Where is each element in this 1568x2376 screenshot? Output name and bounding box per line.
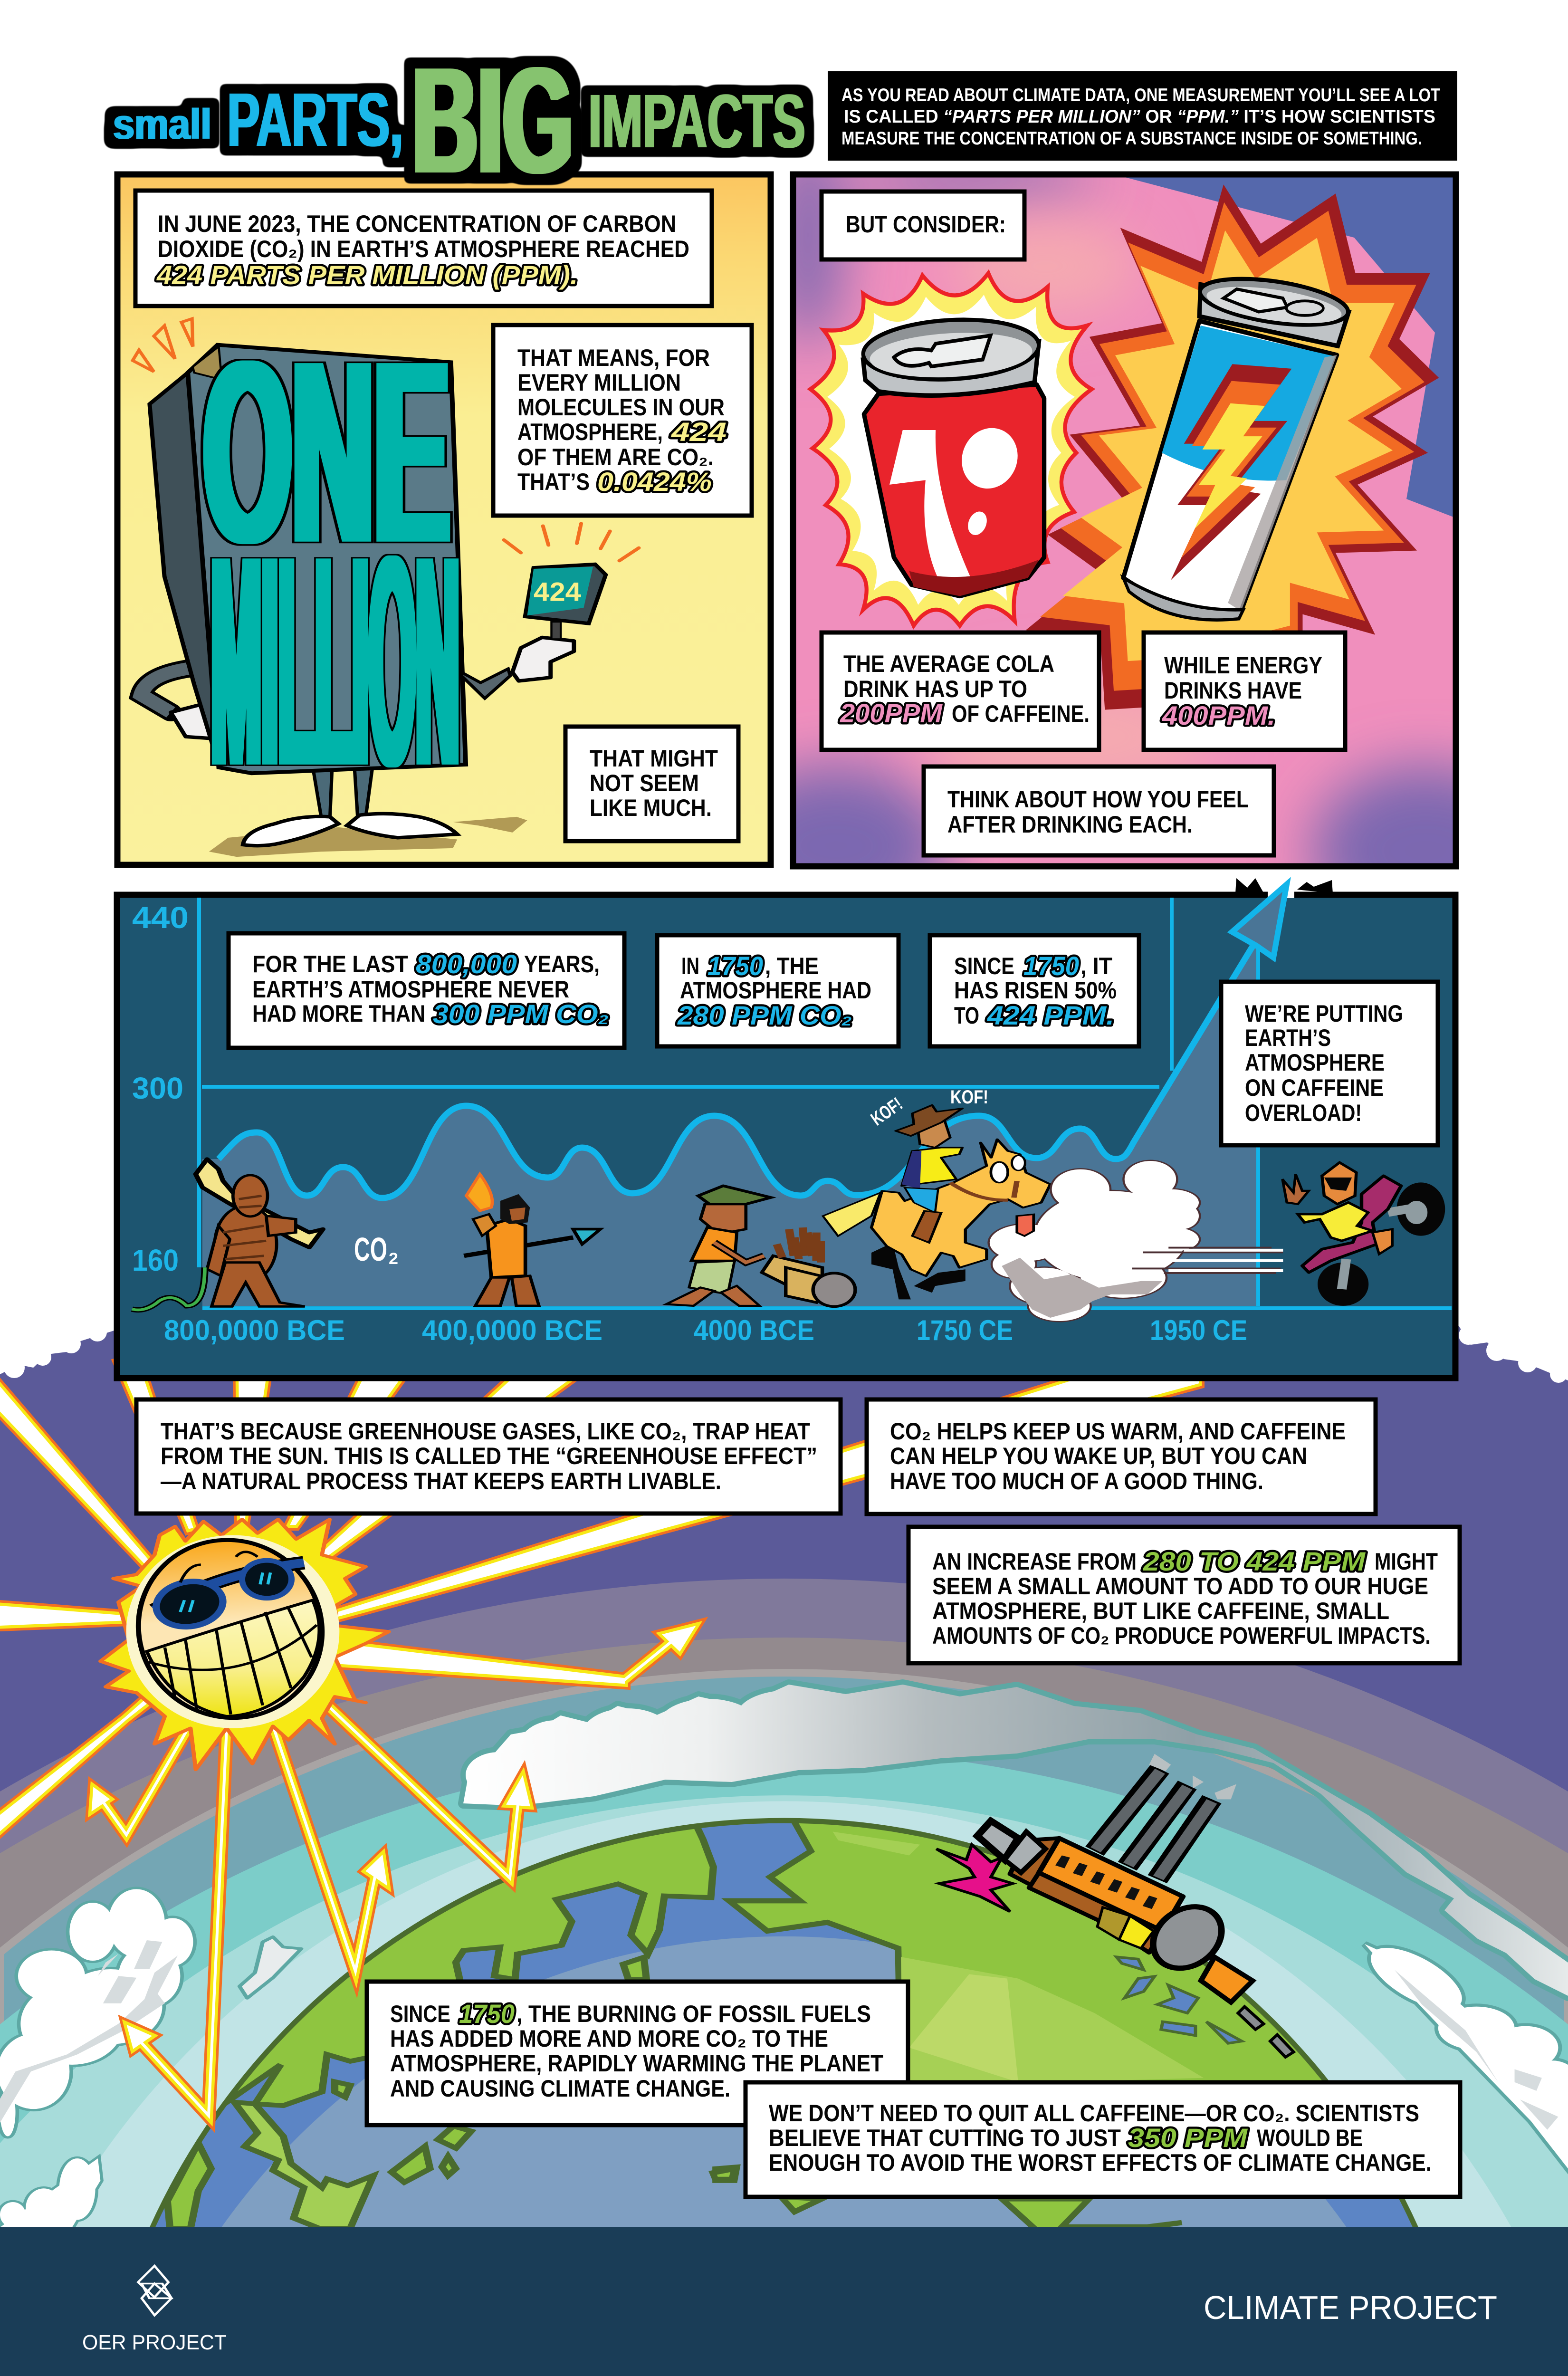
horse back legs	[871, 1243, 966, 1299]
footer project name: CLIMATE PROJECT	[1204, 2289, 1497, 2326]
text box: in 1750: , THE	[765, 953, 819, 979]
icon: smiling sun with sunglasses	[100, 1519, 389, 1770]
y axis labels: 300	[132, 1071, 183, 1105]
text box: that means: 424	[671, 417, 727, 447]
text box: energy drinks	[1144, 632, 1345, 750]
text box: june 2023: 424 PARTS PER MILLION (PPM).	[156, 260, 578, 290]
text box: greenhouse gases: FROM THE SUN. THIS IS CALLED THE “GREENHOUSE EFFECT”	[161, 1443, 817, 1469]
text box: since 1750	[930, 935, 1139, 1046]
sun glow	[126, 1535, 339, 1728]
text box: that means: ATMOSPHERE,	[517, 419, 663, 445]
text box: since 1750: 424 PPM.	[987, 1000, 1114, 1030]
text box: june 2023: DIOXIDE (CO₂) IN EARTH’S ATMOSPHERE REACHED	[158, 236, 689, 262]
y axis labels	[132, 901, 189, 1277]
text box: 350 ppm: 350 PPM	[1128, 2123, 1248, 2153]
text box: that means: OF THEM ARE CO₂.	[517, 444, 714, 470]
cola burst	[811, 273, 1092, 626]
text box: but consider	[822, 192, 1024, 259]
text box: 280 to 424 ppm: SEEM A SMALL AMOUNT TO ADD TO OUR HUGE	[932, 1573, 1428, 1600]
cloud: right side	[1358, 1936, 1568, 2169]
text box: last 800,000 years: YEARS,	[524, 951, 600, 977]
title word: small: small	[113, 101, 211, 148]
text box: caffeine overload: OVERLOAD!	[1245, 1100, 1362, 1126]
motorbike frame	[1302, 1176, 1401, 1273]
alert marks	[133, 319, 193, 372]
intro text block: AS YOU READ ABOUT CLIMATE DATA, ONE MEASUREMENT YOU’LL SEE A LOT	[841, 85, 1440, 105]
speed lines	[1132, 1248, 1283, 1273]
continent: right landmass	[713, 1754, 1422, 2233]
text box: last 800,000 years	[229, 933, 624, 1048]
cola can body	[864, 384, 1044, 596]
text box: in 1750: 280 PPM CO₂	[677, 1000, 852, 1030]
horse tongue	[1017, 1214, 1033, 1236]
figure: biker on motorcycle	[1282, 1162, 1445, 1306]
cloud: small and bottom left	[0, 1937, 301, 2227]
blue hatch rays	[1114, 174, 1456, 518]
x axis labels: 800,0000 BCE	[164, 1314, 345, 1346]
factory pipes	[977, 1821, 1018, 1860]
x axis labels	[164, 1314, 1247, 1346]
panel frame	[793, 174, 1456, 866]
text box: last 800,000 years: 300 PPM CO₂	[433, 999, 609, 1029]
title word: PARTS,: PARTS,	[227, 77, 403, 162]
cowboy hat	[896, 1105, 962, 1136]
sun corona	[100, 1519, 389, 1770]
sign	[525, 564, 606, 623]
text box: energy drinks: WHILE ENERGY	[1164, 652, 1322, 679]
text box: fossil fuels: HAS ADDED MORE AND MORE CO₂ TO THE	[390, 2025, 828, 2052]
biker helmet	[1322, 1162, 1356, 1204]
energy can body	[1123, 321, 1337, 612]
text box: fossil fuels: SINCE	[390, 2001, 450, 2027]
panel blotches and texture	[727, 128, 1539, 936]
text box: caffeine overload: EARTH’S	[1245, 1025, 1331, 1051]
text box: cola: 200PPM	[840, 698, 943, 728]
factory windows	[1055, 1856, 1157, 1909]
factory on earth	[937, 1754, 1294, 2057]
panel: caffeine comparison	[727, 128, 1539, 936]
title word: BIG: BIG	[412, 36, 573, 205]
KOF sound text: KOF!	[867, 1093, 907, 1130]
intro text block	[828, 71, 1457, 161]
footer logo text: OER PROJECT	[82, 2331, 227, 2354]
text box: in 1750	[657, 935, 899, 1046]
icon: OER Project logo	[138, 2266, 172, 2315]
factory end wall	[1010, 1838, 1059, 1887]
cans and bursts	[811, 184, 1439, 710]
lakes near factory	[1117, 1957, 1242, 2043]
cola can swoosh	[889, 430, 971, 578]
text box: caffeine overload	[1221, 982, 1438, 1145]
energy can blue	[1162, 326, 1335, 481]
text box: june 2023	[135, 191, 712, 306]
biker front wheel	[1318, 1263, 1368, 1306]
factory smokestacks	[1095, 1769, 1212, 1879]
text box: too much of a good thing: CAN HELP YOU WAKE UP, BUT YOU CAN	[890, 1443, 1307, 1469]
snake	[132, 1267, 205, 1310]
KOF sound text second: KOF!	[950, 1087, 988, 1108]
footer band	[0, 2227, 1568, 2376]
intro text block: MEASURE THE CONCENTRATION OF A SUBSTANCE INSIDE OF SOMETHING.	[841, 128, 1422, 149]
smoke cloud	[990, 1161, 1199, 1321]
biker leg	[1373, 1229, 1392, 1254]
axis lines	[199, 898, 1452, 1308]
legs	[313, 768, 373, 819]
atmosphere band: violet	[0, 1579, 1568, 2233]
atmosphere band: pale teal	[0, 1795, 1568, 2233]
figure: cowboy on horse with smoke	[823, 1105, 1283, 1321]
text box: greenhouse gases: —A NATURAL PROCESS THAT KEEPS EARTH LIVABLE.	[161, 1468, 721, 1495]
text box: might not seem: NOT SEEM	[590, 770, 699, 796]
text box: that means: EVERY MILLION	[517, 369, 681, 396]
text box: greenhouse gases	[136, 1399, 841, 1514]
text box: in 1750: IN	[681, 953, 699, 979]
y axis labels: 440	[132, 901, 189, 935]
energy can tab	[1224, 289, 1287, 312]
horse body	[871, 1139, 1050, 1276]
horse reins	[950, 1181, 1017, 1200]
text box: in 1750: ATMOSPHERE HAD	[680, 977, 871, 1004]
text box: last 800,000 years: HAD MORE THAN	[252, 1000, 425, 1027]
panel: CO2 timeline chart	[117, 878, 1455, 1378]
text box: 280 to 424 ppm	[908, 1527, 1460, 1663]
x axis labels: 4000 BCE	[694, 1314, 814, 1346]
text box: might not seem: THAT MIGHT	[590, 745, 718, 772]
bone	[196, 1159, 323, 1247]
factory annex	[1201, 1957, 1253, 2002]
small trucks	[1238, 2007, 1294, 2057]
pink spill	[937, 1845, 1013, 1912]
title: small PARTS, BIG IMPACTS	[113, 36, 805, 205]
panel: one million character	[117, 174, 771, 865]
scene: space and atmosphere bands	[0, 1322, 1568, 2233]
character: one million block: ONE	[203, 307, 449, 597]
arrow head on curve	[1232, 884, 1287, 958]
factory upper wall	[1039, 1838, 1183, 1931]
figure: farmer with wheelbarrow	[666, 1186, 822, 1306]
atmosphere ring	[0, 1673, 1568, 2233]
block fold	[193, 346, 222, 380]
text box: 280 to 424 ppm: AN INCREASE FROM	[932, 1548, 1137, 1575]
sign handle	[552, 622, 561, 639]
block front	[188, 345, 466, 773]
text box: since 1750: TO	[954, 1002, 979, 1029]
area under CO2 curve	[202, 943, 1258, 1306]
CO2 label: CO	[354, 1231, 387, 1268]
factory lower wall	[1029, 1873, 1163, 1953]
sun face	[131, 1535, 330, 1723]
text box: but consider: BUT CONSIDER:	[846, 211, 1006, 238]
cola can	[862, 316, 1044, 596]
text box: might not seem: LIKE MUCH.	[590, 795, 712, 821]
cola can bubbles	[951, 417, 1028, 499]
text box: last 800,000 years: EARTH’S ATMOSPHERE NEVER	[252, 976, 569, 1003]
earth outline	[150, 1820, 1418, 2233]
ape fur marks	[223, 1196, 266, 1259]
ground shadow	[209, 817, 527, 857]
earth globe with continents	[103, 1754, 1422, 2233]
figure: early human with torch and spear	[464, 1174, 601, 1306]
factory dome	[1139, 1897, 1235, 1978]
land highlights	[833, 1832, 1204, 2087]
text box: 350 ppm: WE DON’T NEED TO QUIT ALL CAFFEINE—OR CO₂. SCIENTISTS	[769, 2100, 1419, 2127]
text box: greenhouse gases: THAT’S BECAUSE GREENHOUSE GASES, LIKE CO₂, TRAP HEAT	[161, 1418, 810, 1445]
sign sparkle marks	[504, 524, 639, 561]
text box: that means: THAT MEANS, FOR	[517, 345, 710, 371]
CO2 curve line	[219, 943, 1254, 1198]
text box: fossil fuels: 1750	[459, 1999, 515, 2029]
figure: wheelbarrow wheel	[786, 1233, 855, 1306]
x axis labels: 1950 CE	[1150, 1314, 1247, 1346]
right arm and glove	[461, 669, 510, 699]
text box: 350 ppm: BELIEVE THAT CUTTING TO JUST	[769, 2125, 1121, 2151]
sun rays: heat and bouncing arrows	[0, 1342, 1197, 2116]
rays yellow layer	[0, 1342, 1197, 2116]
biker rear wheel	[1397, 1182, 1445, 1236]
earth ocean	[150, 1820, 1418, 2233]
text box: in 1750: 1750	[708, 951, 763, 981]
cowboy boot	[912, 1211, 941, 1243]
chart background	[117, 895, 1455, 1378]
text box: last 800,000 years: 800,000	[416, 949, 517, 979]
rays white core	[0, 1342, 1197, 2116]
character: one million block	[133, 307, 639, 857]
text box: 280 to 424 ppm: MIGHT	[1375, 1548, 1438, 1575]
shoes	[243, 814, 457, 846]
continent: left coast, upper	[103, 1785, 736, 2228]
biker body	[1298, 1202, 1373, 1241]
intro text block: IS CALLED “PARTS PER MILLION” OR “PPM.” IT’S HOW SCIENTISTS	[844, 106, 1435, 127]
text box: too much of a good thing: CO₂ HELPS KEEP US WARM, AND CAFFEINE	[890, 1418, 1346, 1445]
ape body	[207, 1175, 305, 1306]
space background	[0, 1326, 1568, 1792]
border gap	[1268, 889, 1294, 898]
text box: 280 to 424 ppm: 280 TO 424 PPM	[1143, 1546, 1366, 1576]
block side	[150, 373, 220, 768]
energy can lid	[1199, 285, 1349, 346]
cloud: left side large	[0, 1889, 193, 2136]
factory door	[1097, 1907, 1130, 1940]
cowboy trousers	[905, 1188, 938, 1213]
text box: caffeine overload: WE’RE PUTTING	[1245, 1000, 1403, 1027]
text box: fossil fuels: ATMOSPHERE, RAPIDLY WARMING THE PLANET	[390, 2050, 883, 2077]
text box: 350 ppm: WOULD BE	[1257, 2125, 1363, 2151]
text box: since 1750: , IT	[1080, 953, 1112, 979]
text box: 350 ppm	[746, 2082, 1460, 2197]
x axis labels: 1750 CE	[917, 1314, 1013, 1346]
atmosphere band: teal	[0, 1749, 1568, 2233]
title word: IMPACTS: IMPACTS	[588, 78, 805, 163]
cloud: long smog band following the atmosphere	[463, 1685, 1568, 1996]
text box: energy drinks: 400PPM.	[1162, 700, 1275, 730]
text box: caffeine overload: ATMOSPHERE	[1245, 1049, 1385, 1076]
y axis labels: 160	[132, 1243, 179, 1277]
text box: since 1750: HAS RISEN 50%	[954, 977, 1117, 1004]
panel background yellow	[117, 174, 771, 865]
text box: june 2023: IN JUNE 2023, THE CONCENTRATION OF CARBON	[158, 211, 676, 237]
atmosphere band: taupe	[0, 1638, 1568, 2233]
cola can bottom	[909, 560, 1039, 596]
text box: energy drinks: DRINKS HAVE	[1164, 677, 1302, 704]
atmosphere band: palest teal	[53, 1801, 1515, 2233]
text box: that means: THAT’S	[517, 469, 590, 495]
torn white edge of space	[5, 1329, 1565, 1383]
text box: caffeine overload: ON CAFFEINE	[1245, 1074, 1384, 1101]
energy burst	[1026, 184, 1439, 710]
text box: think about	[924, 766, 1274, 855]
sign value: 424	[534, 577, 581, 607]
factory smoke	[1149, 1754, 1236, 1799]
top border break spikes	[1235, 878, 1333, 893]
text box: that means	[493, 325, 752, 516]
text box: cola: DRINK HAS UP TO	[843, 676, 1027, 702]
horse tail	[823, 1193, 880, 1236]
rays orange edge	[0, 1342, 1197, 2116]
energy can	[1123, 271, 1351, 620]
sunglasses	[147, 1557, 304, 1634]
text box: fossil fuels: AND CAUSING CLIMATE CHANGE.	[390, 2075, 730, 2102]
text box: cola: THE AVERAGE COLA	[843, 651, 1054, 677]
text box: 280 to 424 ppm: AMOUNTS OF CO₂ PRODUCE POWERFUL IMPACTS.	[932, 1622, 1431, 1649]
x axis labels: 400,0000 BCE	[422, 1314, 602, 1346]
text box: last 800,000 years: FOR THE LAST	[252, 951, 408, 977]
cola can tab	[894, 335, 991, 366]
text box: since 1750: SINCE	[954, 953, 1014, 979]
panel background pink	[793, 174, 1456, 866]
cola can lid	[863, 341, 1039, 395]
sun teeth	[147, 1600, 319, 1716]
text box: cola	[822, 632, 1099, 750]
energy can bottom	[1123, 578, 1243, 620]
text box: since 1750: 1750	[1023, 951, 1079, 981]
text box: fossil fuels	[367, 1982, 908, 2125]
text box: too much of a good thing: HAVE TOO MUCH OF A GOOD THING.	[890, 1468, 1263, 1495]
text box: 280 to 424 ppm: ATMOSPHERE, BUT LIKE CAFFEINE, SMALL	[932, 1598, 1389, 1624]
text box: 350 ppm: ENOUGH TO AVOID THE WORST EFFECTS OF CLIMATE CHANGE.	[769, 2149, 1432, 2176]
text box: too much of a good thing	[867, 1399, 1376, 1514]
text box: think about: THINK ABOUT HOW YOU FEEL	[947, 786, 1249, 813]
text box: cola: OF CAFFEINE.	[952, 700, 1090, 727]
figure: ape with bone and snake	[132, 1159, 323, 1310]
earth inner ocean shade	[103, 1754, 1422, 2233]
energy can lightning bolt	[1171, 364, 1291, 580]
horse eyes	[991, 1162, 1008, 1183]
biker hand	[1282, 1174, 1309, 1204]
cowboy jacket	[902, 1148, 962, 1186]
text box: that means: MOLECULES IN OUR	[517, 394, 725, 421]
cowboy head	[917, 1119, 950, 1148]
sun eyebrows	[180, 1552, 258, 1582]
CO2 label: 2	[389, 1250, 398, 1268]
text box: fossil fuels: , THE BURNING OF FOSSIL FUELS	[516, 2001, 871, 2027]
text box: think about: AFTER DRINKING EACH.	[947, 811, 1193, 838]
text box: might not seem	[565, 727, 738, 841]
text box: that means: 0.0424%	[597, 467, 712, 497]
left arm and glove	[141, 667, 201, 712]
